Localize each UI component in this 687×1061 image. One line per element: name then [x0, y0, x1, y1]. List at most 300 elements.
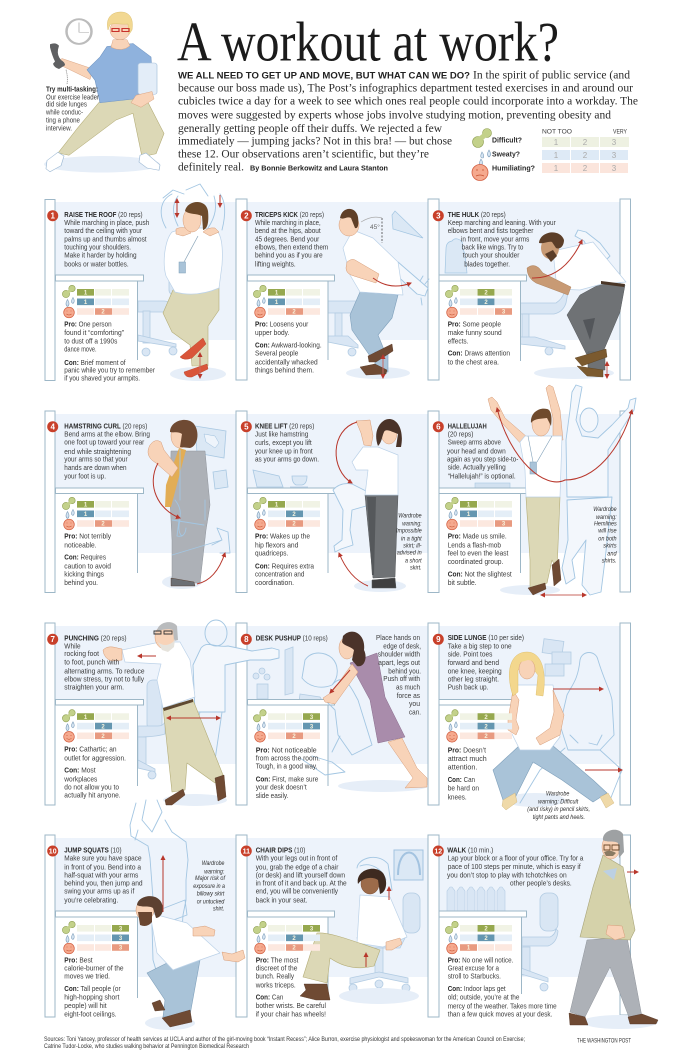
pros and cons: actually hit anyone.: [64, 791, 121, 800]
pros and cons: attract much: [448, 754, 487, 763]
ratings: 2,2,1: 2: [484, 936, 488, 942]
ratings: 1,1,2: 1: [84, 512, 88, 518]
pros and cons: hip flexors and: [255, 541, 298, 550]
exercise description: [64, 845, 143, 905]
ratings: 2,2,1: 2: [484, 926, 488, 932]
intro text: moves were suggested by experts whose jobs involve studying motion, preventing obesity and: [178, 110, 611, 122]
wardrobe warning: tight pants and heels.: [533, 814, 585, 821]
ratings: 2,2,3: 2: [484, 290, 488, 296]
wardrobe warning: shirts.: [602, 558, 617, 565]
exercise description: elbow stress, try not to fully: [64, 675, 144, 684]
pros and cons: do not allow you to: [64, 782, 119, 791]
pros and cons: panic while you try to remember: [64, 366, 156, 375]
badge 4: 4: [50, 422, 55, 432]
legend: rating key: 1: [554, 138, 559, 147]
ratings: 1,1,3: 1: [467, 502, 471, 508]
exercise description: [448, 210, 556, 269]
figure: walk: [569, 830, 658, 1029]
intro text: immediately — jumping jacks? Not in this bra! — but chose: [178, 136, 452, 148]
wardrobe warning: Wardrobe: [593, 506, 617, 513]
exercise description: “Hallelujah!” is optional.: [448, 471, 516, 480]
pros and cons: things behind them.: [255, 366, 314, 375]
legend: rating key: VERY: [613, 129, 628, 136]
pros and cons: Pro: Not noticeable: [256, 745, 317, 754]
badge 12: 12: [434, 848, 442, 856]
exercise description: one knee, keeping: [448, 666, 502, 675]
pros and cons: bother wrists. Be careful: [256, 1001, 326, 1010]
pros and cons: from across the room.: [256, 753, 320, 762]
pros and cons: [255, 955, 326, 1018]
pros and cons: bit subtle.: [448, 578, 477, 587]
pros and cons: [448, 955, 557, 1018]
figure: chair dips: [300, 857, 407, 1000]
pros and cons: moves we tried.: [64, 971, 110, 980]
credit: the washington post: THE WASHINGTON POST: [577, 1038, 631, 1044]
exercise description: While marching in place,: [255, 218, 321, 227]
ratings: 3,3,3: 3: [119, 936, 123, 942]
ratings: 3,2,2: 2: [292, 946, 296, 952]
pros and cons: old; outside, you’re at the: [448, 992, 519, 1001]
pros and cons: found it “comforting”: [64, 328, 125, 337]
pros and cons: Pro: Best: [64, 955, 93, 964]
panel 2: triceps kick: [241, 209, 429, 379]
ratings: 1,2,2: [62, 710, 129, 742]
pros and cons: eight-foot ceilings.: [64, 1009, 117, 1018]
wardrobe warning: skirt; ill-: [403, 543, 422, 550]
wardrobe warning: Wardrobe: [202, 860, 225, 867]
badge 5: [241, 421, 252, 432]
badge 1: 1: [50, 212, 55, 220]
pros and cons: Pro: Some people: [448, 320, 501, 329]
exercise description: palms up and thumbs almost: [64, 235, 147, 244]
panel 7: punching: [47, 620, 279, 806]
pros and cons: attention.: [448, 762, 477, 771]
side note: try multi-tasking: [45, 84, 100, 133]
pros and cons: Con: Awkward-looking.: [255, 341, 322, 350]
pros and cons: Tough, in a good way.: [256, 762, 317, 771]
exercise description: HALLELUJAH: [448, 422, 487, 431]
exercise description: blades together.: [464, 260, 510, 269]
ratings: 1,2,2: 1: [84, 715, 88, 721]
exercise description: force as: [397, 691, 420, 700]
intro text: these 12. Our observations aren’t scientific, but they’re: [178, 148, 429, 160]
exercise description: you’re celebrating.: [64, 896, 118, 905]
badge 11: [241, 846, 252, 856]
exercise description: Bend arms at the elbow. Bring: [64, 430, 150, 439]
wardrobe warning: Impossible: [396, 528, 422, 535]
pros and cons: outlet for aggression.: [64, 753, 126, 762]
exercise description: half-squat with your arms: [64, 870, 139, 879]
legend: rating key: 2: [583, 151, 588, 160]
exercise description: hands are down when: [64, 463, 127, 472]
exercise description: [376, 633, 421, 716]
pros and cons: than a few quick moves at your desk.: [448, 1009, 552, 1018]
exercise description: behind you, then jump and: [64, 878, 143, 887]
pros and cons: [64, 532, 111, 587]
exercise description: end, you will be conveniently: [256, 886, 338, 895]
pros and cons: Pro: One person: [64, 320, 112, 329]
figure: desk pushup: [300, 632, 428, 792]
wardrobe warning: or untucked: [197, 898, 225, 905]
sources: Catrine Tudor-Locke, who studies walking behavior at Pennington Biomedical Research: [44, 1044, 249, 1050]
exercise description: elbows, then extend them: [255, 243, 328, 252]
ratings: 2,2,3: 3: [502, 310, 506, 316]
exercise description: While marching in place, push: [64, 218, 149, 227]
exercise description: Just like hamstring: [255, 430, 308, 439]
badge 3: 3: [436, 212, 441, 220]
ratings: 1,1,2: [62, 497, 129, 530]
figure: the hulk: [527, 230, 626, 379]
badge 10: [47, 846, 58, 856]
ratings: 3,3,2: 3: [310, 715, 314, 721]
pros and cons: noticeable.: [64, 541, 97, 550]
pros and cons: Pro: The most: [256, 955, 298, 964]
pros and cons: if you shaved your armpits.: [64, 374, 140, 383]
pros and cons: [448, 320, 510, 366]
legend: rating key: [472, 128, 629, 180]
wardrobe warning: will rise: [598, 528, 617, 535]
ratings: 1,1,2: 1: [275, 300, 279, 306]
exercise description: KNEE LIFT (20 reps): [255, 422, 314, 431]
pros and cons: [448, 532, 512, 587]
exercise description: as your arms go down.: [255, 455, 319, 464]
legend: rating key: 1: [554, 151, 559, 160]
exercise description: as much: [396, 682, 420, 691]
badge 7: [47, 634, 58, 645]
pros and cons: if your chair has wheels!: [256, 1009, 326, 1018]
ratings: 2,2,2: 2: [484, 734, 488, 740]
legend: rating key: 2: [583, 138, 588, 147]
ratings: 1,1,2: [62, 285, 129, 318]
side note: try multi-tasking: interview.: [46, 124, 72, 133]
exercise description: PUNCHING (20 reps): [64, 634, 127, 643]
exercise description: end while straightening: [64, 447, 131, 456]
ratings: 1,1,2: 1: [275, 290, 279, 296]
ratings: 1,2,2: 2: [292, 512, 296, 518]
sources: Sources: Toni Yancey, professor of health services at UCLA and author of the girl-moving book “Instant Recess”; Alice Burron, exercise physiologist and spokeswoman for the American Council on Exercise;: [44, 1037, 525, 1043]
exercise description: [448, 633, 524, 691]
ratings: 1,1,2: 2: [292, 310, 296, 316]
cubicle frame row 1 with furniture: [45, 199, 630, 382]
wardrobe warning: a short: [405, 558, 422, 565]
pros and cons: Pro: Cathartic; an: [64, 744, 117, 753]
pros and cons: Con: Requires extra: [255, 562, 314, 571]
badge 5: 5: [244, 422, 249, 432]
exercise description: in front of you. Bend into a: [64, 862, 141, 871]
pros and cons: [448, 745, 487, 801]
exercise description: your head and down: [447, 446, 506, 455]
exercise description: in front, move your arms: [461, 235, 530, 244]
wardrobe warning: warning:: [596, 514, 617, 521]
wardrobe warning: shirt.: [213, 906, 224, 913]
exercise description: swing your arms up as if: [64, 886, 134, 895]
pros and cons: upper body.: [255, 328, 289, 337]
wardrobe warning: warning:: [402, 521, 422, 528]
pros and cons: calorie-burner of the: [64, 963, 124, 972]
wardrobe warning: (and risky) in pencil skirts,: [527, 806, 590, 813]
pros and cons: quadriceps.: [255, 549, 288, 558]
exercise description: THE HULK (20 reps): [448, 210, 506, 219]
exercise description: RAISE THE ROOF (20 reps): [64, 210, 143, 219]
exercise description: you, grab the edge of a chair: [256, 862, 339, 871]
panel 6: hallelujah: [433, 385, 636, 595]
wardrobe warning: advised in: [397, 550, 422, 557]
legend: rating key: 3: [612, 138, 617, 147]
pros and cons: Con: Indoor laps get: [448, 984, 506, 993]
ratings: 1,1,3: 1: [467, 512, 471, 518]
panel 8: desk pushup: [241, 632, 428, 800]
badge 8: [241, 634, 252, 645]
exercise description: While: [64, 641, 81, 650]
badge 3: [433, 210, 444, 221]
badge 7: 7: [50, 635, 55, 644]
pros and cons: people) will hit: [64, 1001, 107, 1010]
exercise description: curls, except you lift: [255, 438, 312, 447]
exercise description: your knee up in front: [255, 446, 313, 455]
ratings: 3,2,2: 2: [292, 936, 296, 942]
legend: rating key: 2: [583, 164, 588, 173]
exercise description: your arms so that your: [64, 455, 128, 464]
exercise description: behind you as if you are: [255, 251, 323, 260]
ratings: 1,1,2: 2: [101, 522, 105, 528]
exercise description: [64, 210, 149, 269]
ratings: 1,1,2: 1: [84, 290, 88, 296]
cubicle frame row 3 with furniture: [45, 623, 630, 806]
figure: triceps kick: [339, 209, 429, 379]
pros and cons: kicking things: [64, 570, 104, 579]
exercise description: bend at the hips, about: [255, 226, 321, 235]
exercise description: Sweep arms above: [448, 438, 501, 447]
pros and cons: make funny sound: [448, 328, 502, 337]
pros and cons: high-hopping short: [64, 993, 119, 1002]
figure: knee lift: [333, 419, 406, 592]
ratings: 2,2,1: [445, 921, 512, 954]
wardrobe warning: warning:: [204, 868, 224, 875]
pros and cons: feel to even the least: [448, 549, 508, 558]
badge 11: 11: [243, 848, 250, 856]
pros and cons: Pro: Loosens your: [255, 320, 309, 329]
pros and cons: discreet of the: [256, 963, 297, 972]
exercise description: Push back up.: [448, 682, 488, 691]
wardrobe warning: skirt.: [410, 564, 422, 571]
exercise description: touching your shoulders.: [64, 243, 131, 252]
badge 10: 10: [49, 848, 57, 856]
pros and cons: [255, 320, 322, 375]
exercise description: (20 reps): [448, 430, 473, 439]
pros and cons: [255, 532, 314, 587]
ratings: 2,2,1: 1: [467, 946, 471, 952]
exercise description: pace of 100 steps per minute, which is easy if: [448, 862, 581, 871]
exercise description: Keep marching and leaning. With your: [448, 218, 556, 227]
exercise description: apart, legs out: [378, 658, 420, 667]
ratings: 3,3,2: [253, 710, 320, 742]
exercise description: side. Point toes: [448, 649, 493, 658]
exercise description: back in your seat.: [256, 895, 307, 904]
badge 9: [433, 634, 444, 645]
pros and cons: Con: Brief moment of: [64, 358, 126, 367]
illustration: exercise leader on the phone doing side lunge: [44, 12, 164, 172]
pros and cons: knees.: [448, 792, 467, 801]
exercise description: JUMP SQUATS (10): [64, 845, 122, 854]
exercise description: to foot, punch with: [64, 658, 119, 667]
ratings: 1,1,2: 2: [101, 310, 105, 316]
pros and cons: Con: Most: [64, 765, 96, 774]
pros and cons: Con: Can: [448, 775, 475, 784]
legend: rating key: Difficult?: [492, 136, 522, 145]
ratings: 3,3,2: 2: [292, 734, 296, 740]
pros and cons: Great excuse for a: [448, 963, 499, 972]
side note: try multi-tasking: Our exercise leader: [46, 92, 100, 101]
ratings: 3,2,2: [253, 921, 320, 954]
wardrobe warning: warning: Difficult: [538, 798, 578, 805]
pros and cons: Pro: Not terribly: [64, 532, 111, 541]
pros and cons: [63, 744, 126, 800]
exercise description: (or desk) and lift yourself down: [256, 870, 345, 879]
legend: rating key: 1: [554, 164, 559, 173]
pros and cons: be hard on: [448, 783, 479, 792]
exercise description: Make sure you have space: [64, 853, 142, 862]
wardrobe warning: Major risk of: [195, 875, 226, 882]
intro text: [178, 70, 638, 174]
exercise description: again as you step side-to-: [447, 455, 519, 464]
legend: rating key: NOT TOO: [542, 129, 572, 136]
exercise description: toward the ceiling with your: [64, 226, 143, 235]
pros and cons: Con: Can: [256, 992, 283, 1001]
wardrobe warning: [193, 860, 226, 913]
pros and cons: behind you.: [64, 578, 98, 587]
intro text: By Bonnie Berkowitz and Laura Stanton: [250, 163, 388, 172]
exercise description: you don’t stop to play with tchotchkes on: [447, 870, 567, 879]
pros and cons: accidentally whacked: [255, 357, 318, 366]
exercise description: Place hands on: [376, 633, 420, 642]
ratings: 2,2,2: 2: [484, 715, 488, 721]
side note: try multi-tasking: did side lunges: [46, 100, 87, 109]
wardrobe warning: on both: [598, 535, 617, 542]
ratings: 1,2,2: 2: [292, 522, 296, 528]
badge 2: [241, 210, 252, 221]
intro text: generally getting people off their duffs. We rejected a few: [178, 123, 443, 135]
exercise description: CHAIR DIPS (10): [256, 845, 305, 854]
pros and cons: [256, 745, 320, 800]
legend: rating key: 3: [612, 151, 617, 160]
intro text: In the spirit of public service (and: [473, 70, 630, 82]
pros and cons: Pro: Made us smile.: [448, 532, 507, 541]
figure: punching: [103, 620, 279, 806]
exercise description: side. Actually yelling: [448, 463, 506, 472]
ratings: 3,3,3: 3: [119, 926, 123, 932]
exercise description: Make it harder by holding: [64, 251, 137, 260]
exercise description: WALK (10 min.): [447, 845, 493, 854]
ratings: 2,2,3: [445, 285, 512, 318]
pros and cons: [64, 955, 124, 1018]
intro text: cubicles twice a day for a week to see which ones real people could incorporate into a workday. The: [178, 96, 638, 108]
exercise description: [256, 845, 347, 904]
panel 9: side lunge: [433, 633, 622, 821]
ratings: 1,1,3: 3: [502, 522, 506, 528]
ratings: 3,3,2: 3: [310, 724, 314, 730]
exercise description: back like wings. Try to: [462, 243, 523, 252]
exercise description: in front of it and back up. At the: [256, 878, 347, 887]
exercise title: DESK PUSHUP (10 reps): [256, 634, 328, 643]
ratings: 3,2,2: 3: [310, 926, 314, 932]
pros and cons: effects.: [448, 336, 468, 345]
wardrobe warning: and: [607, 550, 617, 557]
wardrobe warning: exposure in a: [193, 883, 225, 890]
pros and cons: dance move.: [64, 345, 97, 354]
badge 9: 9: [436, 635, 441, 644]
exercise description: straighten your arm.: [64, 682, 124, 691]
sources: [44, 1037, 525, 1050]
wardrobe warning: [593, 506, 617, 565]
side note: try multi-tasking: while conduc-: [45, 107, 84, 116]
exercise description: other leg straight.: [448, 675, 499, 684]
cubicle frame row 4 with furniture: [45, 835, 630, 1018]
exercise description: Lap your block or a floor of your office. Try for a: [448, 853, 583, 862]
exercise description: lifting weights.: [255, 260, 296, 269]
figure: triceps kick: 45°: [370, 223, 380, 231]
pros and cons: bunch. Really: [256, 971, 294, 980]
pros and cons: Con: Not the slightest: [448, 570, 512, 579]
ratings: 2,2,3: 2: [484, 300, 488, 306]
cubicle frame row 2 with decor: [45, 411, 630, 594]
legend: rating key: 3: [612, 164, 617, 173]
exercise description: With your legs out in front of: [256, 853, 337, 862]
badge 12: [433, 846, 444, 856]
exercise description: touch your shoulder: [463, 251, 520, 260]
exercise description: one foot up toward your rear: [64, 438, 145, 447]
pros and cons: to dust off a 1990s: [64, 336, 118, 345]
exercise description: [255, 210, 328, 269]
pros and cons: Con: Tall people (or: [64, 984, 121, 993]
wardrobe warning: [396, 513, 422, 571]
ratings: 1,1,3: [445, 497, 512, 530]
panel 11: chair dips: [241, 845, 407, 1018]
exercise description: Take a big step to one: [448, 641, 512, 650]
side note: try multi-tasking: ting a phone: [46, 115, 80, 124]
exercise description: you: [409, 699, 420, 708]
pros and cons: Several people: [255, 349, 298, 358]
exercise description: can.: [409, 707, 421, 716]
wardrobe warning: skirts: [603, 543, 617, 550]
exercise description: [255, 422, 319, 464]
pros and cons: to the chest area.: [448, 357, 499, 366]
wardrobe warning: Wardrobe: [546, 790, 570, 797]
pros and cons: mercy of the weather. Takes more time: [448, 1001, 557, 1010]
ratings: 1,1,2: [253, 285, 320, 318]
exercise description: rocking foot: [64, 649, 99, 658]
ratings: 1,2,2: [253, 497, 320, 530]
exercise description: [447, 422, 519, 480]
ratings: 2,2,2: [445, 710, 512, 742]
exercise description: 45 degrees. Bend your: [255, 235, 320, 244]
exercise description: behind you.: [388, 666, 421, 675]
intro text: because our boss made us), The Post’s infographics department tested exercises in and around our: [178, 82, 633, 94]
ratings: 3,3,3: 3: [119, 946, 123, 952]
exercise description: HAMSTRING CURL (20 reps): [64, 422, 147, 431]
pros and cons: works triceps.: [255, 980, 296, 989]
figure: hamstring curl: [148, 420, 230, 589]
pros and cons: your desk doesn’t: [256, 783, 307, 792]
badge 2: 2: [244, 212, 249, 220]
badge 8: 8: [244, 635, 249, 644]
panel 1: raise the roof: [47, 184, 226, 383]
exercise description: forward and bend: [448, 658, 499, 667]
pros and cons: Pro: Doesn’t: [448, 745, 486, 754]
ratings: 3,3,3: [62, 921, 129, 954]
ratings: 1,1,2: 1: [84, 300, 88, 306]
wardrobe warning: [527, 790, 590, 821]
badge 4: [47, 421, 58, 432]
